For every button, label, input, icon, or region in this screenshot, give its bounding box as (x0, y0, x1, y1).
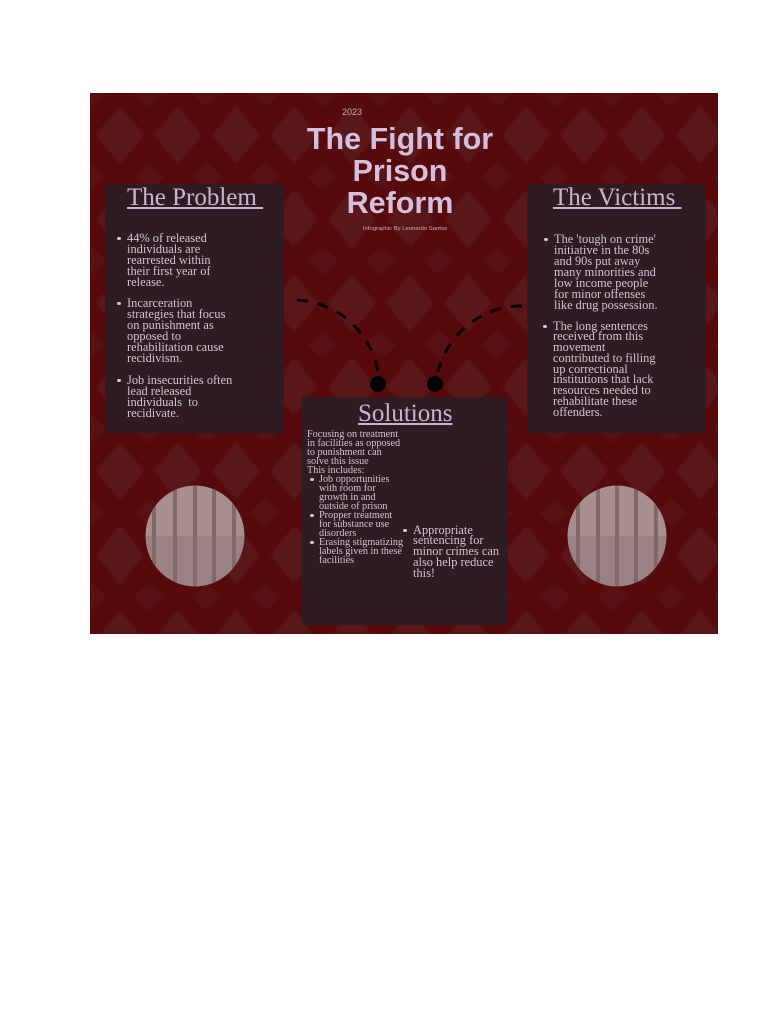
text: job insecurities: recidivate. (127, 406, 179, 420)
panel: the problem (105, 184, 284, 433)
text: job insecurities: lead released (127, 384, 191, 398)
arrow: left dashed connector (296, 298, 380, 372)
text: job insecurities: Job insecurities often (127, 372, 232, 386)
title: Prison (353, 154, 447, 188)
text: tough on crime (554, 234, 658, 310)
text: appropriate sentencing: this! (413, 566, 435, 580)
text: treatment: for substance use (319, 518, 389, 530)
text: job opportunities: outside of prison (319, 500, 387, 512)
text: long sentences: rehabilitate these (553, 394, 637, 408)
panel: solutions (302, 397, 508, 625)
byline: Infographic By Leonardo Santos (363, 226, 447, 232)
text: incarceration strategies: strategies that focus (127, 306, 225, 320)
text: incarceration strategies: rehabilitation cause (127, 340, 224, 354)
text: rearrest statistic: individuals are (127, 242, 200, 256)
text: long sentences: institutions that lack (553, 372, 654, 386)
text: tough on crime: initiative in the 80s (554, 242, 649, 256)
icon: left prison bars circle (146, 486, 244, 586)
text: appropriate sentencing: minor crimes can (413, 544, 499, 558)
text: solutions intro: solve this issue (307, 456, 369, 466)
text: appropriate sentencing: sentencing for (413, 533, 484, 547)
text: incarceration strategies: opposed to (127, 328, 181, 342)
text: long sentences: The long sentences (553, 318, 648, 332)
title (307, 122, 493, 220)
heading: the victims: The Victims (553, 184, 675, 211)
title: Reform (347, 186, 453, 220)
text: long sentences: offenders. (553, 405, 603, 419)
text: rearrest statistic: 44% of released (127, 230, 207, 244)
text: job insecurities (127, 374, 232, 418)
text: rearrest statistic: release. (127, 274, 164, 288)
poster: prison reform infographic (90, 93, 718, 634)
text: erasing labels: labels given in these (319, 546, 402, 556)
text: incarceration strategies: recidivism. (127, 350, 182, 364)
text: solutions intro: to punishment can (307, 446, 382, 458)
text: erasing labels (319, 538, 403, 564)
text: job opportunities (319, 474, 389, 510)
text: job opportunities: growth in and (319, 492, 376, 502)
text: long sentences: contributed to filling (553, 351, 656, 365)
panel: the victims (527, 184, 706, 433)
text: appropriate sentencing: also help reduce (413, 555, 494, 569)
text: appropriate sentencing: Appropriate (413, 522, 473, 536)
text: treatment (319, 510, 392, 538)
text: long sentences: received from this (553, 329, 643, 343)
text: appropriate sentencing (413, 524, 499, 579)
text: tough on crime: The 'tough on crime' (554, 232, 656, 246)
arrow: right dashed connector (436, 304, 522, 372)
text: solutions intro: in facilities as opposed (307, 438, 400, 448)
title: The Fight for (307, 122, 493, 156)
heading: solutions: Solutions (358, 400, 452, 427)
text: solutions intro (307, 428, 400, 476)
text: job opportunities: with room for (319, 482, 376, 494)
text: long sentences: up correctional (553, 362, 628, 376)
text: tough on crime: for minor offenses (554, 286, 645, 300)
text: long sentences: movement (553, 340, 605, 354)
icon: left connector dot (370, 376, 386, 392)
text: incarceration strategies: on punishment as (127, 318, 214, 332)
text: tough on crime: and 90s put away (554, 254, 640, 268)
year label: 2023 (342, 107, 362, 117)
icon: right connector dot (427, 376, 443, 392)
icon: right prison bars circle (568, 486, 666, 586)
text: solutions intro: Focusing on treatment (307, 428, 398, 440)
text: incarceration strategies (127, 298, 225, 364)
text: erasing labels: Erasing stigmatizing (319, 536, 403, 548)
text: erasing labels: facilities (319, 554, 354, 566)
text: incarceration strategies: Incarceration (127, 296, 192, 310)
heading: the problem: The Problem (127, 184, 257, 211)
text: job opportunities: Job opportunities (319, 474, 389, 484)
text: long sentences (553, 320, 656, 418)
text: solutions intro: This includes: (307, 464, 364, 476)
text: tough on crime: like drug possession. (554, 298, 658, 312)
text: long sentences: resources needed to (553, 383, 651, 397)
text: treatment: Propper treatment (319, 510, 392, 520)
text: rearrest statistic: rearrested within (127, 252, 211, 266)
text: treatment: disorders (319, 528, 356, 538)
text: rearrest statistic (127, 232, 211, 288)
text: job insecurities: individuals to (127, 394, 198, 408)
text: tough on crime: many minorities and (554, 264, 656, 278)
text: rearrest statistic: their first year of (127, 264, 211, 278)
text: tough on crime: low income people (554, 276, 648, 290)
